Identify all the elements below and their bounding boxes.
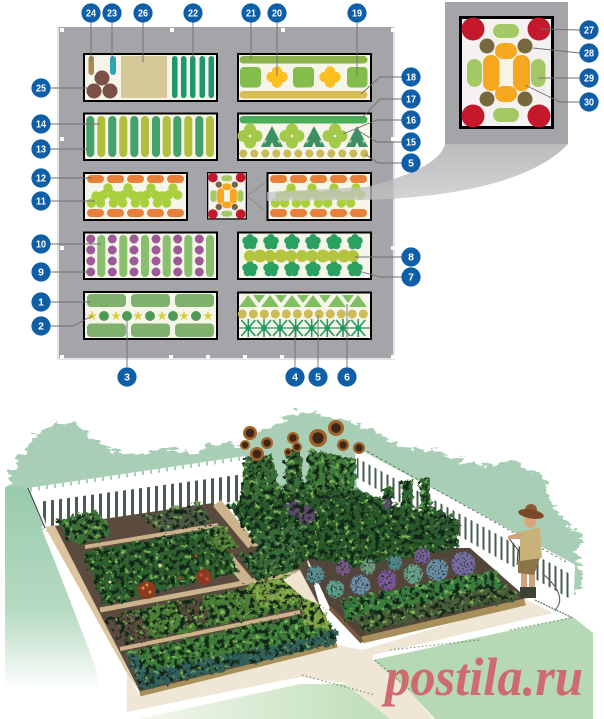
badge 22 [183,3,203,23]
badge 25 [31,78,51,98]
badge 26: 26 [138,8,148,20]
sunflower foliage [240,454,282,502]
bed: row 2 left (14, 13) [84,114,217,160]
callout panel: enlarged center bed [445,2,568,144]
bed: row 3 left (12, 11) [84,173,187,220]
badge 7 [401,267,421,287]
badge 26 [133,3,153,23]
badge 27: 27 [584,25,594,37]
number badges [31,3,599,387]
purple cabbage top [296,505,316,525]
badge 27 [579,20,599,40]
trellis columns [402,480,412,518]
badge 1 [31,292,51,312]
badge 19 [347,3,367,23]
badge 17 [401,89,421,109]
bed: row 5 right (4, 5, 6) [238,292,371,339]
badge 21 [241,3,261,23]
badge 5 lower: 5 [315,372,321,384]
badge 15 [401,132,421,152]
bed: row 1 left (24, 23, 25, 26, 22) [84,54,217,101]
badge 4 [285,367,305,387]
badge 2 [31,316,51,336]
badge 13 [31,139,51,159]
right block soil [302,547,527,642]
badge 28 [579,43,599,63]
badge 5 lower [308,367,328,387]
badge 20 [267,3,287,23]
left lawn [5,487,110,700]
plants [57,445,520,690]
badge 11: 11 [36,196,46,208]
illustration: garden scene [5,412,593,719]
badge 8 [401,247,421,267]
badge 9 [31,262,51,282]
badge 30 [579,92,599,112]
sparse top bed [142,503,214,532]
cabbages [306,548,475,598]
badge 22: 22 [188,8,198,20]
bed: center small (27-30 miniature) [207,172,247,220]
panel: garden plan base [57,27,395,360]
badge 6: 6 [344,372,350,384]
badge 9: 9 [38,267,44,279]
bed: row 5 left (1, 2, 3) [84,292,217,339]
grass edge marks [302,618,570,695]
badge 10: 10 [36,239,46,251]
badge 17: 17 [406,94,416,106]
watermark: postila.ru [381,647,583,707]
badge 5 upper [401,153,421,173]
badge 29: 29 [584,73,594,85]
badge 23: 23 [107,8,117,20]
badge 3 [117,367,137,387]
badge 24 [81,3,101,23]
left block soil [55,503,337,692]
white fence return at left [42,530,127,712]
badge 8: 8 [408,252,414,264]
cream wedge between blocks [283,570,318,604]
bed: row 3 right [268,173,371,220]
badge 14: 14 [36,119,46,131]
badge 10 [31,234,51,254]
leader lines [50,22,580,368]
blue-green row [125,652,150,688]
badge 12: 12 [36,173,46,185]
bed: row 2 right (17, 16, 15, 5) [238,114,371,160]
flower clusters [108,554,212,599]
badge 25: 25 [36,83,46,95]
path [127,600,553,719]
badge 4: 4 [292,372,298,384]
right block dense foliage [228,482,460,568]
badge 18 [401,67,421,87]
bed: row 4 right (8, 7) [238,232,371,279]
sunflowers [240,420,365,461]
gardener [508,504,560,611]
dense main row [82,527,240,606]
badge 14 [31,114,51,134]
middle patch by path [238,540,300,582]
badge 30: 30 [584,97,594,109]
badge 11 [31,191,51,211]
badge 21: 21 [246,8,256,20]
badge 29 [579,68,599,88]
badge 7: 7 [408,272,414,284]
badge 16: 16 [406,115,416,127]
bottom middle lawn [138,684,392,719]
badge 6 [337,367,357,387]
salad rows [122,572,300,645]
badge 2: 2 [38,321,44,333]
badge 16 [401,110,421,130]
front timber edges [140,602,525,694]
badge 3: 3 [124,372,130,384]
leek row [340,570,505,622]
lower right lawn [373,617,593,719]
badge 13: 13 [36,144,46,156]
timber paths [85,503,300,649]
timber frame left [45,525,139,692]
callout funnel band [267,144,568,201]
badge 18: 18 [406,72,416,84]
badge 20: 20 [272,8,282,20]
lower green row [124,615,336,675]
badge 1: 1 [38,297,44,309]
left fence [28,456,245,530]
badge 24: 24 [86,8,96,20]
badge 28: 28 [584,48,594,60]
right fence [355,447,575,618]
badge 19: 19 [352,8,362,20]
bed: row 4 left (10, 9) [84,232,217,279]
badge 5 upper: 5 [408,158,414,170]
cabbage corner bed [57,510,110,545]
hedge background [7,412,583,600]
badge 23 [102,3,122,23]
badge 12 [31,168,51,188]
bed: row 1 right (21, 20, 19, 18) [238,54,371,101]
badge 15: 15 [406,137,416,149]
